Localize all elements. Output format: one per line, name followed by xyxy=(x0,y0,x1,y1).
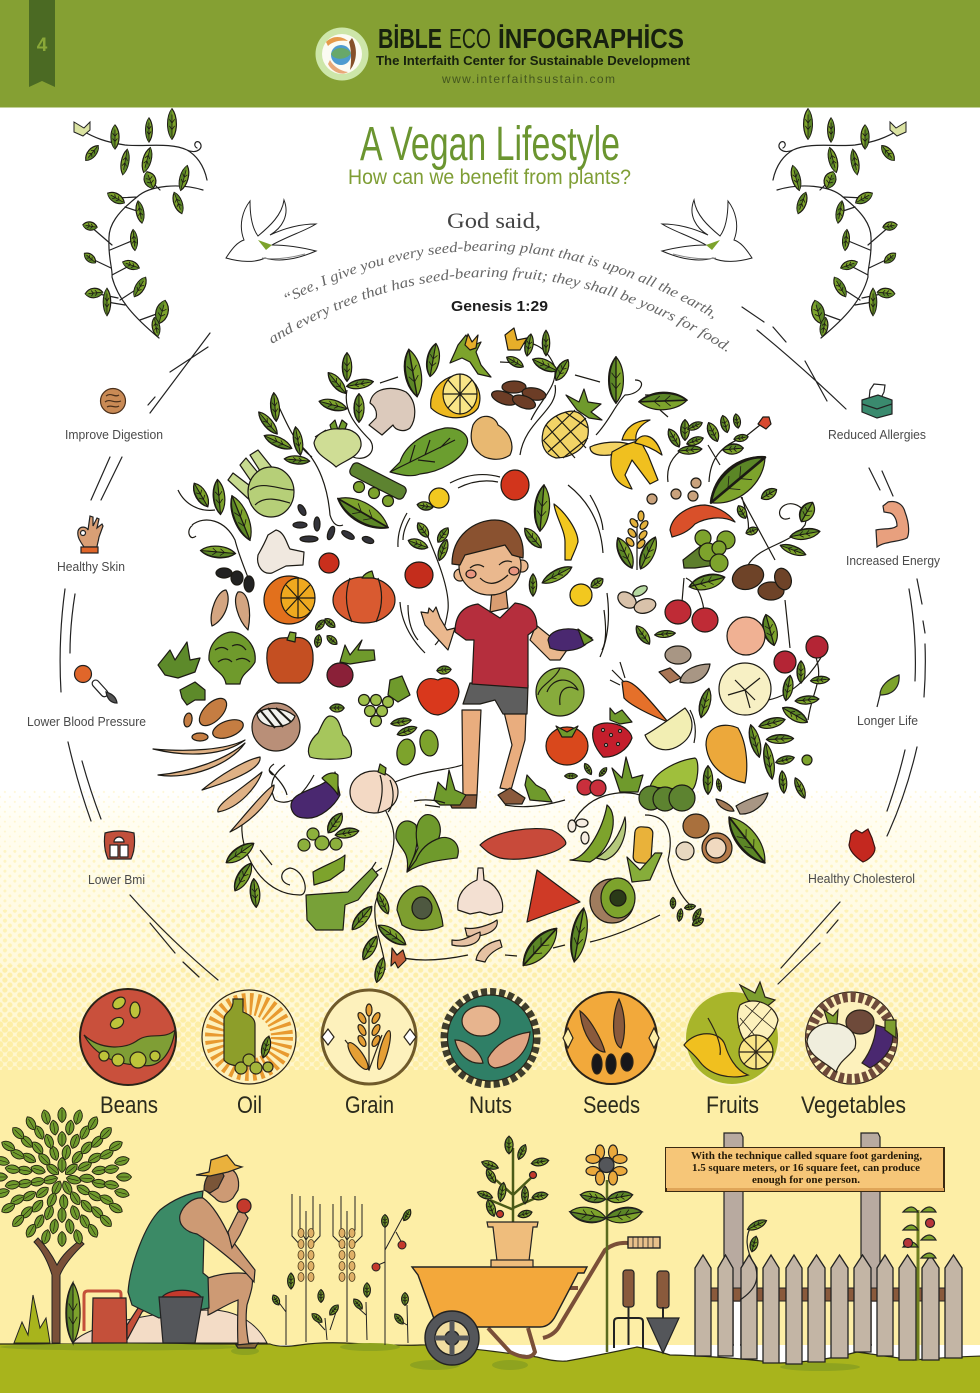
category labels: Fruits xyxy=(706,1092,759,1119)
dates xyxy=(490,381,547,412)
wheelbarrow xyxy=(412,1237,660,1365)
pomegranates xyxy=(774,636,828,673)
flower sprig xyxy=(450,335,491,377)
potato xyxy=(471,416,512,459)
peach xyxy=(727,617,765,655)
wheelbarrow: handle and legs xyxy=(488,1243,628,1357)
carrot xyxy=(610,662,668,722)
artichoke xyxy=(209,632,255,684)
boy: shorts xyxy=(463,683,528,714)
benefit: longer life: Longer Life xyxy=(857,714,918,728)
olives xyxy=(395,729,440,766)
ground xyxy=(0,1343,980,1393)
green peas xyxy=(298,828,342,851)
coconut xyxy=(252,703,300,751)
leaves xyxy=(190,330,830,983)
small nuts xyxy=(647,478,701,504)
strawberry xyxy=(593,708,632,757)
avocado xyxy=(397,886,443,930)
benefit: lower bmi: Lower Bmi xyxy=(88,873,145,887)
category labels: Nuts xyxy=(469,1092,512,1119)
cauliflower xyxy=(719,663,771,715)
potted plant xyxy=(476,1136,549,1267)
subtitle: How can we benefit from plants? xyxy=(348,166,631,189)
cabbage xyxy=(536,668,584,716)
almonds xyxy=(716,793,768,814)
tomato plant xyxy=(903,1207,936,1360)
curved scripture quote: and every tree that has seed-bearing fruit; they shall be yours for food. xyxy=(270,267,730,352)
sign board xyxy=(665,1147,945,1192)
split pea pod xyxy=(313,855,345,885)
organisation name: The Interfaith Center for Sustainable Development xyxy=(376,53,691,68)
wheelbarrow: tray xyxy=(412,1267,587,1327)
chili xyxy=(670,505,735,537)
rock xyxy=(73,1310,267,1343)
category: beans xyxy=(80,989,176,1085)
boy: grass and ground xyxy=(414,770,565,807)
benefit: reduced allergies: Reduced Allergies xyxy=(828,428,926,442)
benefit: healthy skin xyxy=(57,516,125,574)
long bean pods xyxy=(153,740,274,832)
sign text: With the technique called square foot gardening, xyxy=(691,1151,922,1162)
icon: ok hand xyxy=(78,516,103,553)
fennel xyxy=(228,450,294,517)
red apple xyxy=(417,678,459,715)
yellow berry xyxy=(429,488,449,508)
icon: blood pressure bulb xyxy=(74,666,117,703)
category labels: Seeds xyxy=(583,1092,640,1119)
peanuts xyxy=(183,694,246,742)
benefit: healthy cholesterol xyxy=(808,829,915,886)
category: seeds xyxy=(563,992,659,1084)
garlic xyxy=(458,868,503,915)
category labels: Beans xyxy=(100,1092,158,1119)
parsley xyxy=(158,642,205,705)
benefit: lower blood pressure: Lower Blood Pressure xyxy=(27,715,146,729)
icon: leaf xyxy=(877,675,899,707)
picket fence xyxy=(695,1255,962,1364)
title: A Vegan Lifestyle xyxy=(360,118,620,171)
grass tuft xyxy=(612,757,643,792)
boy: head xyxy=(452,520,528,612)
black seeds xyxy=(293,503,375,545)
category: nuts xyxy=(444,992,536,1084)
curved scripture quote: “See, I give you every seed-bearing plant that is upon all the earth, xyxy=(284,241,714,319)
benefit: lower blood pressure xyxy=(27,666,146,729)
gardener xyxy=(128,1155,258,1348)
broccoli xyxy=(683,530,735,572)
pineapple xyxy=(542,389,602,458)
icon: heart xyxy=(849,829,875,862)
category: vegetables xyxy=(806,992,898,1084)
category labels: Vegetables xyxy=(801,1092,906,1119)
peeled banana xyxy=(590,420,662,489)
white beans xyxy=(568,819,589,844)
melon slice xyxy=(645,708,692,750)
tomato xyxy=(501,470,529,500)
benefit: reduced allergies xyxy=(828,384,926,442)
gardener: hat xyxy=(196,1155,242,1176)
kiwi xyxy=(590,878,635,923)
icon: intestines xyxy=(100,388,126,414)
cashews xyxy=(452,920,502,962)
benefit: healthy cholesterol: Healthy Cholesterol xyxy=(808,872,915,886)
brown seeds xyxy=(659,646,710,683)
pear xyxy=(308,716,352,759)
boy: shirt xyxy=(455,603,537,688)
scripture intro: God said, xyxy=(447,208,541,233)
corn xyxy=(627,826,662,882)
small yellow fruit xyxy=(570,584,592,606)
category labels: Grain xyxy=(345,1092,394,1119)
mango xyxy=(706,725,747,783)
bush and tall leaf xyxy=(14,1283,80,1343)
benefit: improve digestion: Improve Digestion xyxy=(65,428,163,442)
category labels: Oil xyxy=(237,1092,262,1119)
header band xyxy=(0,0,980,108)
climbing vine xyxy=(740,1217,768,1300)
fence posts xyxy=(724,1133,880,1345)
benefit: longer life xyxy=(857,675,918,728)
orange xyxy=(264,576,315,624)
fence rail xyxy=(711,1288,945,1301)
boy: legs and sandals xyxy=(448,710,526,808)
eggplant left xyxy=(291,772,340,818)
gardener: head xyxy=(205,1168,239,1202)
vine: top left xyxy=(74,109,207,338)
cucumber xyxy=(348,461,408,501)
food circle: plants around the boy xyxy=(153,328,830,983)
pistachios xyxy=(615,584,657,616)
wheelbarrow: wheel xyxy=(425,1311,479,1365)
gardener: dress xyxy=(128,1191,209,1318)
peas xyxy=(354,482,394,506)
watering can xyxy=(84,1291,148,1343)
page number ribbon xyxy=(29,0,55,87)
category: fruits xyxy=(684,982,779,1085)
sunflower seeds xyxy=(211,568,254,630)
pea pod xyxy=(570,805,626,862)
button mushrooms xyxy=(258,530,304,573)
scripture reference: Genesis 1:29 xyxy=(451,298,548,315)
bird: right swallow xyxy=(662,200,752,261)
icon: tissue box xyxy=(862,384,892,418)
organisation name: BİBLE xyxy=(378,23,442,54)
apple on branch xyxy=(405,562,433,588)
benefit: lower bmi xyxy=(88,831,145,887)
bell pepper xyxy=(267,632,313,683)
beet xyxy=(327,640,375,687)
walnuts xyxy=(676,814,732,863)
wheat xyxy=(624,511,650,570)
benefit: improve digestion xyxy=(65,388,163,442)
sweet potato xyxy=(480,829,566,859)
sign text: 1.5 square meters, or 16 square feet, can produce xyxy=(692,1163,920,1174)
garden trowel xyxy=(647,1271,679,1353)
tomato large xyxy=(546,726,588,765)
coffee beans xyxy=(729,560,794,600)
turnip xyxy=(314,420,361,467)
tomato in hand xyxy=(237,1199,251,1213)
leek xyxy=(306,862,382,930)
category: grain xyxy=(322,990,416,1084)
page number ribbon: 4 xyxy=(37,35,48,56)
organisation name xyxy=(376,23,691,86)
icon: flexed arm xyxy=(876,501,909,547)
vines and inner arcs xyxy=(178,343,825,970)
boy: arms xyxy=(421,607,567,660)
yellow flower xyxy=(465,328,527,350)
vine: top right xyxy=(773,109,906,338)
sign text xyxy=(691,1151,922,1186)
onion xyxy=(350,764,398,813)
squash and slices xyxy=(639,758,698,811)
gardener: leg xyxy=(208,1273,252,1345)
boy: eggplant xyxy=(548,629,593,651)
fence gaps xyxy=(734,1302,878,1354)
red berry xyxy=(319,553,339,573)
cherries xyxy=(665,578,718,632)
banana xyxy=(554,504,578,560)
category: oil xyxy=(202,990,296,1084)
boy xyxy=(414,520,593,808)
wheat stalks xyxy=(292,1194,362,1342)
logo xyxy=(316,28,368,80)
grapes xyxy=(358,676,410,726)
icon: bathroom scale xyxy=(104,831,135,859)
gardener: arm xyxy=(180,1198,255,1282)
seedlings and tomato stem xyxy=(271,1208,413,1345)
mushroom xyxy=(369,388,415,435)
category labels xyxy=(100,1092,906,1119)
outer ring arcs xyxy=(60,307,925,984)
bucket of tomatoes xyxy=(159,1290,203,1343)
benefit: healthy skin: Healthy Skin xyxy=(57,560,125,574)
organisation name: İNFOGRAPHİCS xyxy=(498,23,684,54)
tree xyxy=(0,1108,132,1343)
bird: left swallow xyxy=(226,200,316,261)
garden fork xyxy=(614,1270,643,1348)
watermelon xyxy=(527,870,580,922)
benefit: increased energy: Increased Energy xyxy=(846,554,941,568)
spinach leaf xyxy=(390,428,468,476)
sign text: enough for one person. xyxy=(752,1175,860,1186)
radishes xyxy=(565,762,608,796)
spinach bunch xyxy=(396,815,458,872)
organisation name: ECO xyxy=(449,23,491,54)
pumpkin xyxy=(333,571,395,623)
sunflower xyxy=(569,1145,643,1352)
lemon xyxy=(431,374,480,418)
benefit: increased energy xyxy=(846,501,941,568)
organisation name: www.interfaithsustain.com xyxy=(441,72,615,86)
